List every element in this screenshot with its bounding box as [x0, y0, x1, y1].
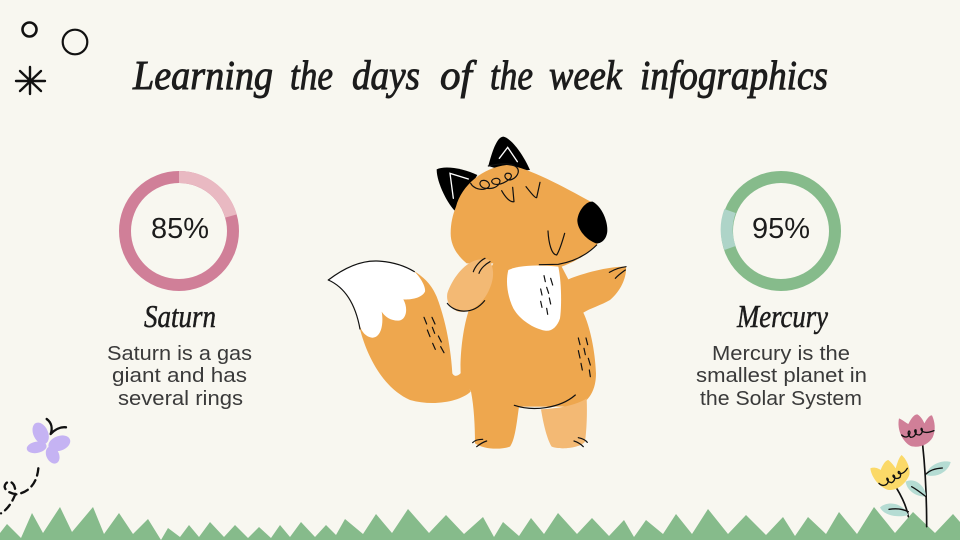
value: 95%: 95%: [752, 213, 810, 245]
butterfly antennae: [47, 419, 66, 434]
icon: flowers: [870, 414, 951, 527]
pink flower: [898, 414, 935, 447]
grass: [0, 507, 960, 540]
illustration: fox: [328, 137, 626, 449]
description: Mercury: the Solar System: [700, 388, 862, 410]
fox tail: [359, 272, 471, 403]
flower stems: [897, 445, 927, 527]
fox ears: [437, 137, 530, 212]
heading: Saturn: Saturn: [144, 298, 216, 334]
donut chart: 95%: [727, 177, 835, 285]
heading: Mercury: Mercury: [736, 298, 829, 334]
description: Saturn: [107, 343, 252, 410]
title: the: [290, 52, 333, 98]
title: the: [490, 52, 533, 98]
yellow flower: [870, 455, 910, 490]
title: days: [352, 52, 420, 98]
decoration: circles and asterisk: [16, 22, 87, 94]
donut chart: 85%: [125, 177, 233, 285]
description: Saturn: several rings: [118, 388, 243, 410]
fox back leg: [541, 398, 587, 448]
panel: Saturn: [107, 177, 252, 410]
flower squiggles: [879, 428, 934, 485]
description: Saturn: Saturn is a gas: [107, 343, 252, 365]
description: Mercury: Mercury is the: [712, 343, 850, 365]
title: of: [440, 52, 478, 98]
description: Mercury: smallest planet in: [696, 365, 867, 387]
description: Saturn: giant and has: [112, 365, 247, 387]
title: infographics: [640, 52, 828, 98]
fox line details: [328, 164, 626, 447]
fox body: [451, 165, 626, 449]
fox nose: [577, 202, 607, 243]
dashed trail: [1, 468, 38, 513]
title: [132, 52, 828, 98]
panel: Mercury: [696, 177, 867, 410]
fox tail tip: [328, 261, 425, 338]
icon: butterfly with dashed trail: [1, 419, 72, 513]
description: Mercury: [696, 343, 867, 410]
flower leaves: [880, 461, 951, 516]
value: 85%: 85%: [151, 213, 209, 245]
title: week: [549, 52, 623, 98]
butterfly wings: [26, 420, 72, 466]
fox bib: [507, 265, 561, 331]
fox raised arm: [447, 259, 493, 312]
leaf veins: [889, 468, 942, 512]
title: Learning: [132, 52, 273, 98]
